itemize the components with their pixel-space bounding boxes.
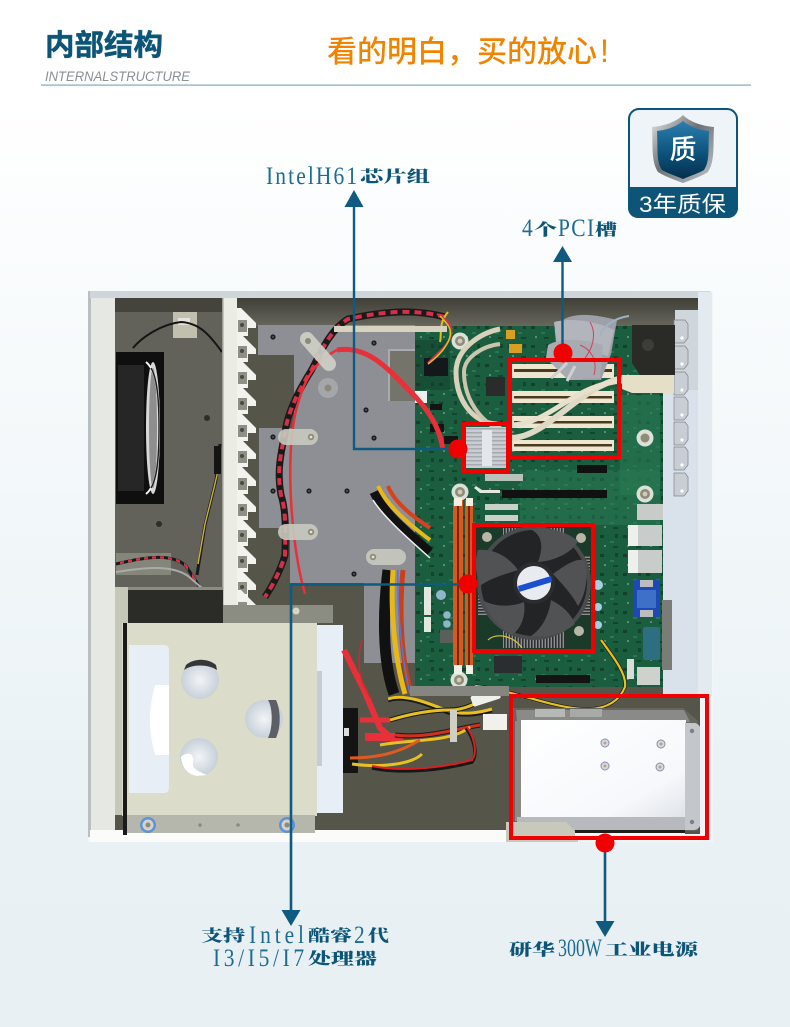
label: chipset: 芯片组 (357, 167, 430, 186)
label: power supply: 研华 (509, 940, 555, 959)
wiring (265, 312, 625, 773)
callout box: PSU (511, 696, 707, 838)
CPU socket chip (486, 377, 505, 396)
callout box: PCI slots (510, 360, 619, 458)
label: chipset: IntelH61 (266, 163, 357, 190)
label: power supply: 300W (558, 934, 602, 962)
power bundle (350, 486, 625, 771)
arrow: PCI (553, 246, 572, 362)
arrow: CPU (282, 574, 478, 926)
plate strip under motherboard (410, 686, 509, 696)
header (41, 29, 751, 86)
left bay with fan (115, 298, 223, 588)
chassis photo (88, 291, 713, 842)
red SATA cable (290, 349, 443, 742)
callout box: CPU (474, 525, 593, 651)
label: PCI slots: 4 (522, 215, 533, 242)
label: power supply: 工业电源 (605, 940, 701, 959)
label: CPU support: 处理器 (308, 949, 377, 968)
right rail (663, 390, 698, 697)
label stickers (485, 474, 523, 481)
hard drive tray (115, 587, 343, 835)
badge: 3 year warranty: 3年质保 (639, 192, 726, 217)
slogan: 看的明白，买的放心 (327, 36, 597, 69)
label: PCI slots: PCI (558, 215, 594, 242)
callout box: chipset (464, 424, 508, 471)
label: chipset (266, 163, 430, 190)
gray mounting plate (258, 325, 415, 663)
mounting holes (180, 660, 283, 776)
label: CPU support: Intel (249, 922, 304, 949)
arrow: chipset (344, 190, 468, 458)
icon: shield: 质 (670, 135, 696, 165)
label: PCI slots: 槽 (595, 220, 617, 239)
PCI slots (512, 364, 614, 451)
icon: cooling fan (116, 352, 164, 504)
motherboard (415, 310, 698, 697)
memory slots (453, 498, 473, 674)
fan blades (476, 528, 587, 636)
card retainer strip (222, 298, 256, 618)
chipset heatsink (466, 427, 507, 468)
CPU cooler (476, 526, 593, 650)
badge: 3 year warranty (628, 109, 738, 218)
label: power supply (509, 934, 701, 962)
label: CPU support (201, 922, 390, 972)
subtitle: INTERNALSTRUCTURE (45, 68, 191, 84)
arrow: PSU (596, 834, 614, 937)
label: PCI slots: 个 (534, 220, 557, 239)
io ports (627, 504, 663, 685)
power supply (506, 708, 701, 842)
cable clamps (278, 338, 457, 742)
label: CPU support: 2 (354, 922, 365, 949)
title: 内部结构 (45, 29, 163, 62)
label: CPU support: 代 (368, 926, 390, 945)
PCIe slots (502, 490, 607, 498)
label: CPU support: I3/I5/I7 (213, 945, 304, 972)
chassis outer shell (88, 291, 713, 842)
label: PCI slots (522, 215, 617, 242)
ribbon and data cables (456, 315, 674, 438)
label: CPU support: 支持 (201, 926, 245, 945)
twisted red and black cable (265, 312, 452, 597)
label: CPU support: 酷睿 (308, 926, 352, 945)
slogan: ! (600, 33, 609, 69)
